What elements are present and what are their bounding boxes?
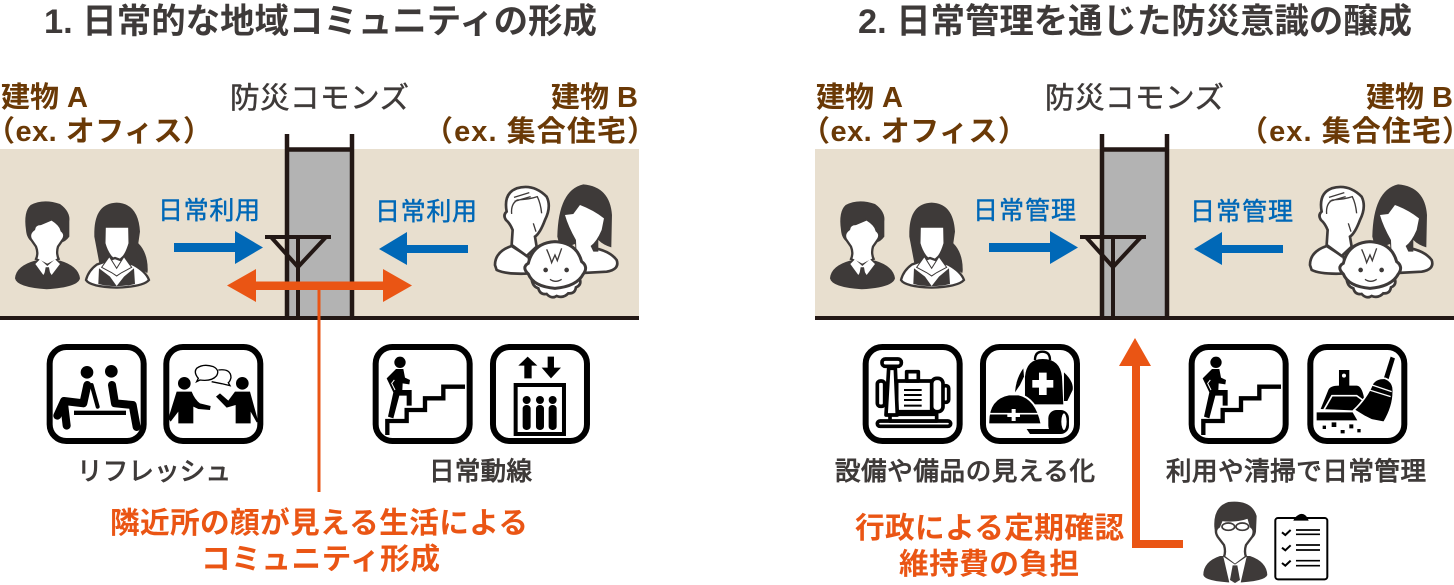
icon: elevator: [493, 347, 587, 441]
icon: pump: [866, 347, 960, 441]
commons structure: [0, 134, 639, 320]
callout: maintenance cost: 維持費の負担: [899, 548, 1079, 581]
panel: disaster awareness through daily management: [801, 81, 1454, 583]
callout: regular checks: 行政による定期確認: [855, 512, 1124, 545]
icon: stairs: [1192, 347, 1286, 441]
icon: conversation: [166, 347, 260, 441]
people: family: [1310, 184, 1432, 297]
label: building B example: （ex. 集合住宅）: [424, 115, 656, 148]
icon: administrator: [1203, 502, 1267, 583]
label: daily management left: 日常管理: [973, 197, 1076, 225]
icon: dustpan and broom: [1310, 347, 1404, 441]
label: building A example: （ex. オフィス）: [801, 116, 1027, 148]
callout: neighbours: 隣近所の顔が見える生活による: [110, 506, 528, 540]
label: bosai commons: 防災コモンズ: [230, 82, 409, 115]
icon: people on bench: [50, 347, 144, 441]
label: building A: 建物 A: [816, 81, 903, 114]
label: building A: 建物 A: [1, 81, 88, 114]
label: daily management right: 日常管理: [1190, 198, 1293, 226]
arrow: community interaction: [227, 269, 412, 302]
title: left panel: 1. 日常的な地域コミュニティの形成: [44, 3, 597, 41]
leader line: [318, 288, 320, 492]
label: refresh: リフレッシュ: [77, 458, 231, 486]
arrow: daily use left: [174, 231, 263, 264]
label: daily circulation: 日常動線: [429, 458, 532, 486]
label: daily use left: 日常利用: [158, 197, 260, 225]
label: visible equipment: 設備や備品の見える化: [835, 458, 1095, 486]
label: use and cleaning: 利用や清掃で日常管理: [1166, 458, 1426, 486]
commons structure: [815, 134, 1454, 320]
panel: daily community formation: [0, 81, 656, 576]
arrow: daily management right: [1194, 232, 1283, 265]
people: family: [495, 184, 617, 297]
icon: stairs: [376, 347, 470, 441]
title: right panel: 2. 日常管理を通じた防災意識の醸成: [858, 3, 1412, 41]
callout: community formation: コミュニティ形成: [201, 543, 440, 576]
arrow: daily use right: [379, 232, 468, 265]
label: bosai commons: 防災コモンズ: [1045, 82, 1224, 115]
arrow: administration input: [1119, 338, 1183, 548]
label: building B: 建物 B: [551, 81, 638, 114]
icon: checklist: [1275, 514, 1327, 579]
arrow: daily management left: [989, 231, 1078, 264]
ground band: [0, 149, 639, 317]
icon: emergency backpack and helmet: [983, 347, 1077, 441]
people: office workers: [15, 201, 149, 289]
label: daily use right: 日常利用: [375, 198, 477, 226]
ground band: [815, 149, 1454, 317]
people: office workers: [830, 201, 964, 289]
label: building B: 建物 B: [1366, 81, 1453, 114]
